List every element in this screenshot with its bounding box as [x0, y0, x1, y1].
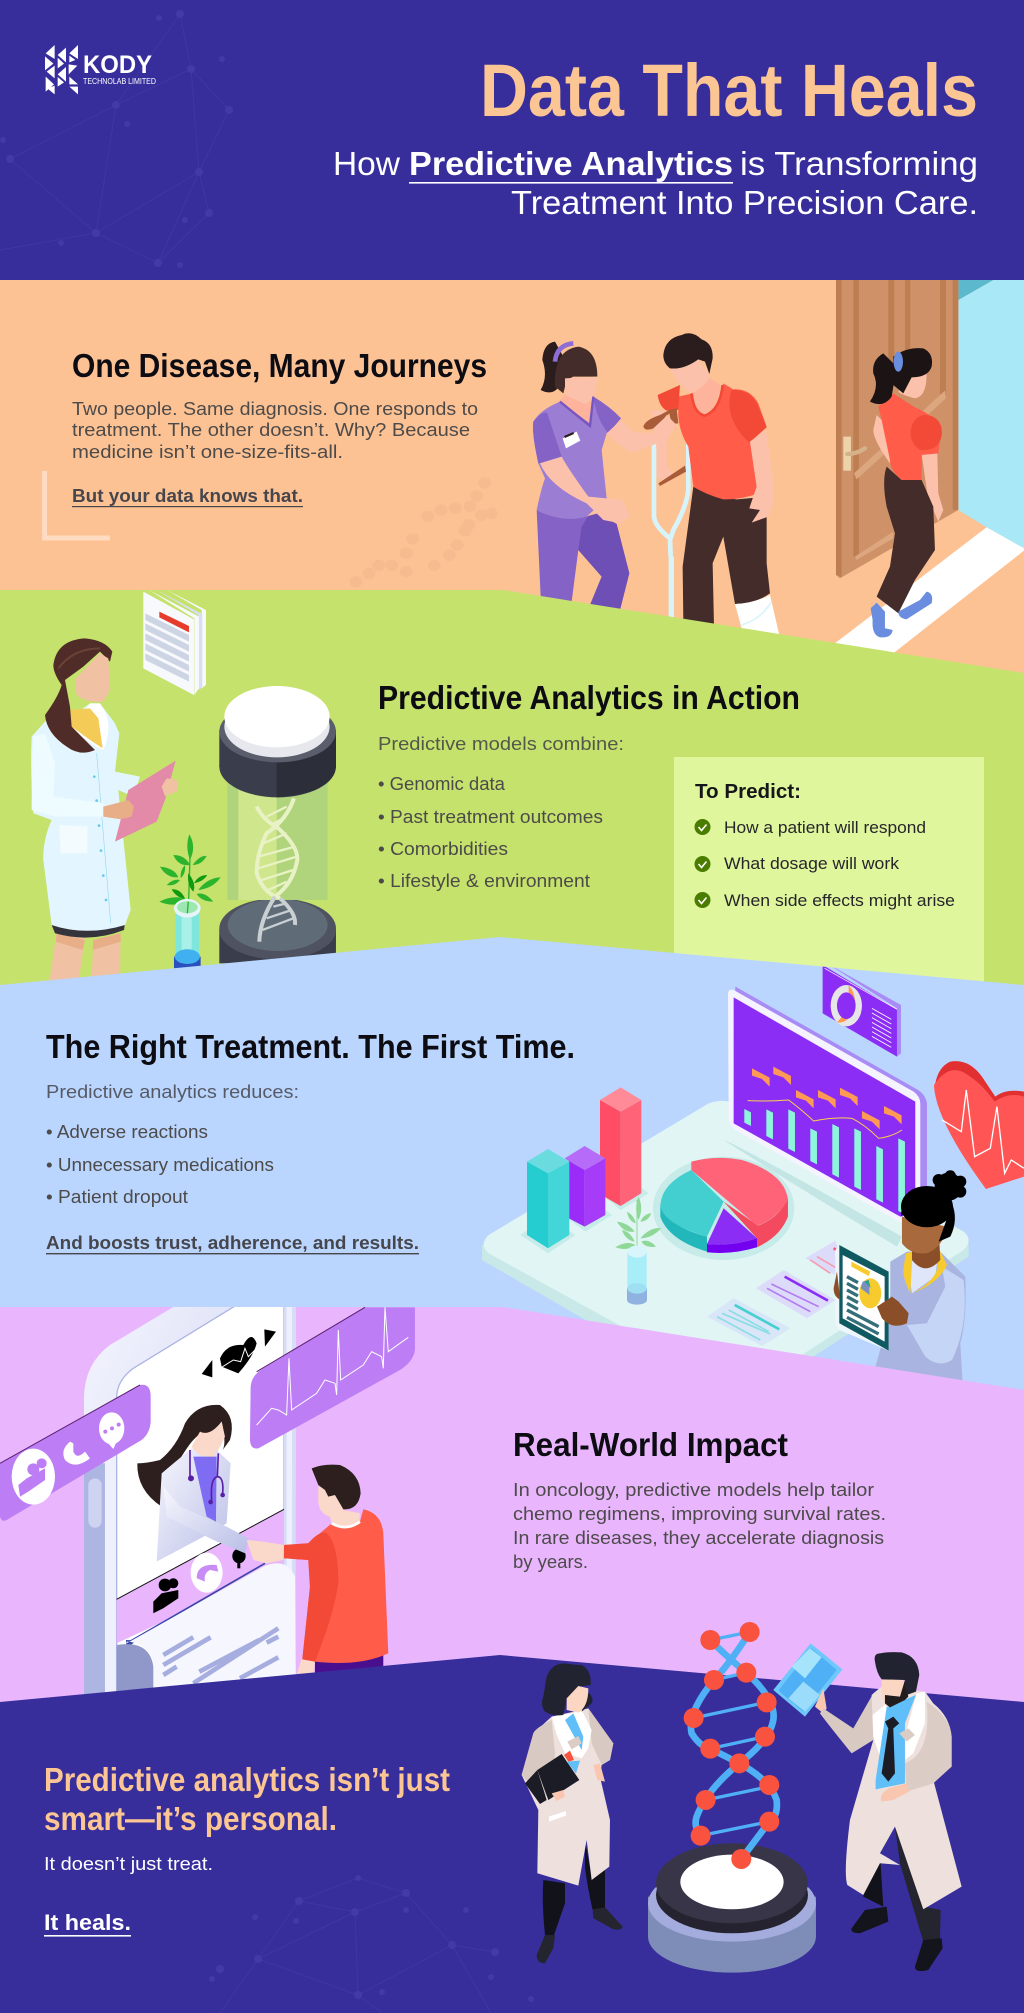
illustration: isometric bar chart	[520, 1087, 649, 1253]
closing callout: It heals.	[44, 1910, 131, 1935]
closing headline: Predictive analytics isn’t just	[44, 1761, 450, 1798]
lower call bar	[117, 1509, 284, 1648]
illustration: dashboard monitor	[728, 987, 927, 1223]
paragraph: Two people. Same diagnosis. One responds to	[72, 399, 478, 419]
list of reductions: • Patient dropout	[46, 1187, 188, 1207]
panel: closing	[0, 1622, 1024, 2013]
list of data sources	[378, 774, 603, 891]
paragraph: by years.	[513, 1552, 588, 1572]
list of data sources: • Past treatment outcomes	[378, 807, 603, 827]
list of reductions: • Unnecessary medications	[46, 1155, 274, 1175]
illustration: plant in test tube	[159, 834, 221, 968]
panel: the right treatment	[0, 937, 1024, 1407]
check item 2: What dosage will work	[724, 854, 900, 873]
illustration: walking woman	[870, 348, 943, 637]
illustration: nurse	[533, 342, 677, 610]
paragraph: In rare diseases, they accelerate diagnosis	[513, 1528, 884, 1548]
panel: predictive analytics in action	[0, 590, 1024, 1000]
illustration: patient on crutches	[643, 333, 779, 635]
logo: Kody Technolab	[45, 45, 156, 94]
illustration: pie chart	[653, 1157, 794, 1260]
panel: one disease, many journeys	[0, 280, 1024, 680]
paper	[116, 1563, 296, 1691]
subtitle: Predictive Analytics	[409, 146, 733, 183]
heart monitor icon	[202, 1329, 276, 1377]
report cards	[707, 1241, 842, 1346]
paragraph: In oncology, predictive models help tailor	[513, 1480, 874, 1500]
illustration: ecg card	[250, 1307, 415, 1449]
subtitle: is Transforming	[740, 146, 978, 183]
illustration: video doctor	[137, 1405, 248, 1562]
illustration: male scientist	[773, 1643, 962, 1971]
intro text: Predictive models combine:	[378, 734, 624, 754]
heading: Real-World Impact	[513, 1426, 788, 1463]
illustration: doctor with clipboard	[31, 638, 178, 983]
paragraph: medicine isn’t one-size-fits-all.	[72, 442, 343, 462]
list of reductions	[46, 1122, 274, 1207]
corner bracket	[44, 471, 110, 538]
logo: Kody Technolab: KODY	[83, 51, 152, 79]
illustration: heart with ecg	[934, 1061, 1024, 1189]
heading: Predictive Analytics in Action	[378, 679, 800, 716]
illustration: door and corridor	[835, 280, 1024, 653]
illustration: doctor with tablet	[834, 1170, 966, 1382]
illustration: telemedicine phone	[84, 1305, 296, 1707]
illustration: man shaking hands	[247, 1465, 388, 1675]
heading: One Disease, Many Journeys	[72, 347, 487, 384]
list of data sources: • Genomic data	[378, 774, 506, 794]
illustration: plant in vial	[615, 1197, 661, 1305]
title: Data That Heals	[480, 49, 978, 132]
paragraph	[72, 399, 478, 462]
callout: But your data knows that.	[72, 486, 303, 506]
list of data sources: • Lifestyle & environment	[378, 871, 590, 891]
logo: Kody Technolab: TECHNOLAB LIMITED	[83, 76, 156, 86]
illustration: analytics table	[482, 1101, 969, 1407]
check item 3: When side effects might arise	[724, 891, 955, 910]
subtitle: How	[333, 146, 401, 183]
illustration: dna capsule	[219, 686, 336, 963]
to predict box: To Predict:	[695, 781, 801, 803]
body: one disease	[72, 347, 487, 507]
heading: The Right Treatment. The First Time.	[46, 1028, 575, 1065]
illustration: dna helix	[684, 1622, 779, 1869]
closing line: It doesn’t just treat.	[44, 1854, 213, 1874]
illustration: female scientist	[522, 1663, 623, 1963]
illustration: floating donut card	[823, 963, 901, 1057]
list of reductions: • Adverse reactions	[46, 1122, 208, 1142]
paragraph: chemo regimens, improving survival rates.	[513, 1504, 886, 1524]
illustration: contact icons card	[0, 1385, 151, 1521]
panel: header	[0, 0, 1024, 280]
panel: real-world impact	[0, 1305, 1024, 1720]
illustration: document stack	[143, 590, 206, 695]
callout: And boosts trust, adherence, and results.	[46, 1233, 419, 1253]
to predict box	[674, 757, 984, 997]
paragraph: treatment. The other doesn’t. Why? Because	[72, 420, 470, 440]
faint dna strand	[349, 477, 498, 587]
closing headline	[44, 1761, 450, 1837]
paragraph	[513, 1480, 886, 1572]
illustration: dna pedestal	[648, 1843, 816, 1973]
check item 1: How a patient will respond	[724, 818, 926, 837]
list of data sources: • Comorbidities	[378, 839, 508, 859]
closing headline: smart—it’s personal.	[44, 1800, 337, 1837]
intro text: Predictive analytics reduces:	[46, 1082, 299, 1102]
subtitle: Treatment Into Precision Care.	[511, 185, 978, 222]
subtitle	[333, 146, 978, 222]
